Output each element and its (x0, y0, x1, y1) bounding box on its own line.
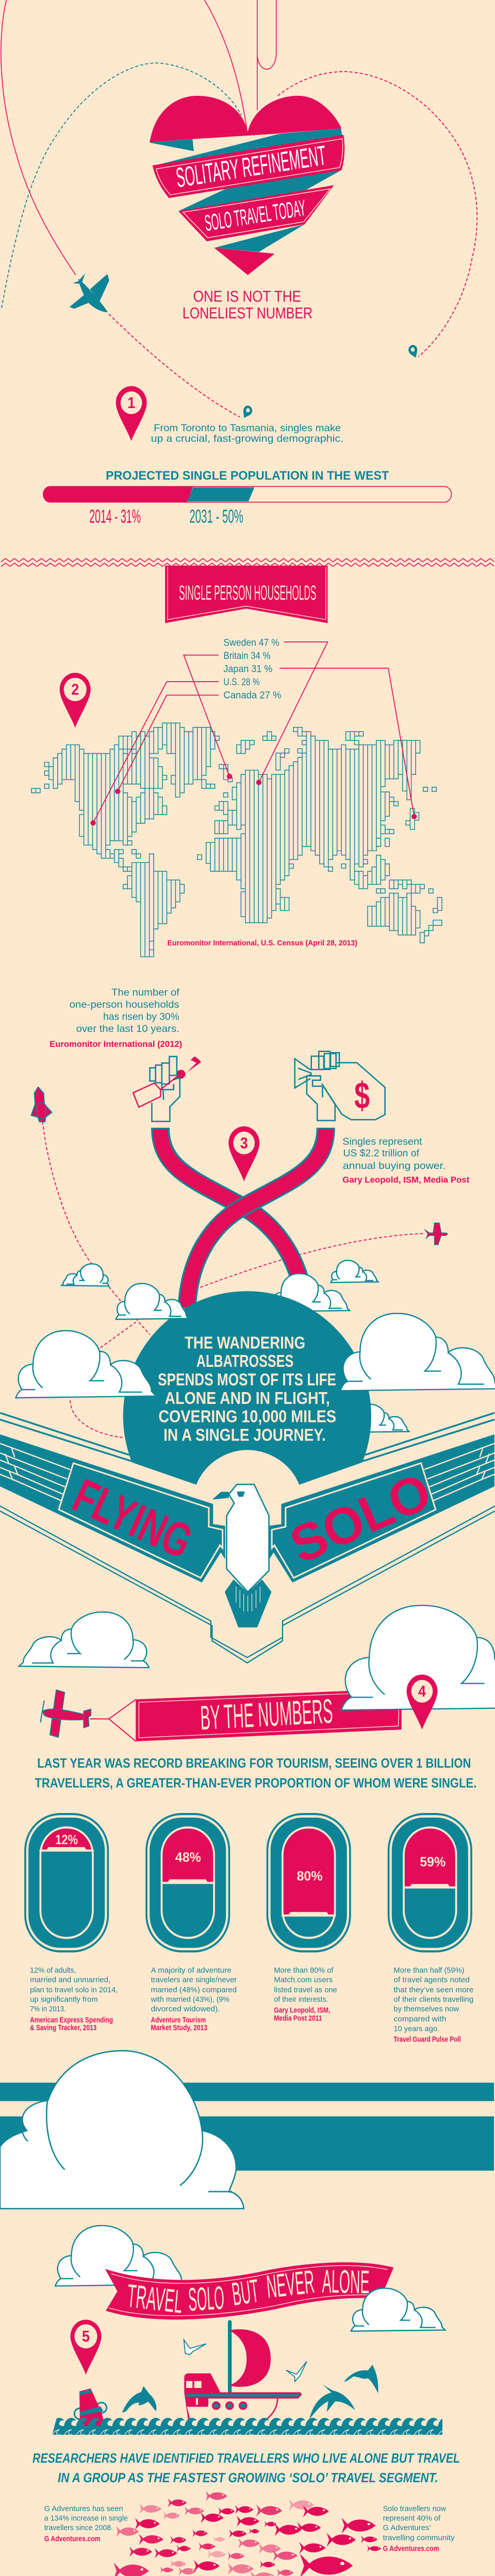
icon: biplane (40, 1690, 91, 1737)
stat: 40% of community: travelling community (383, 2534, 455, 2543)
wing left: FLYING (65, 1468, 200, 1569)
heart with ribbons (150, 96, 344, 275)
icon: rocket (31, 1087, 52, 1122)
callout text: ALONE AND IN FLIGHT, (165, 1388, 330, 1408)
icon: money bag (295, 1052, 385, 1121)
pin 1: 1 (127, 395, 135, 412)
pin 1 (116, 386, 147, 441)
icon: money bag: $ (354, 1075, 370, 1117)
caption 3: of their interests. (274, 1995, 328, 2004)
teal stripes (0, 2082, 494, 2171)
window 48% (145, 1813, 230, 1953)
country labels: Sweden 47 % (223, 637, 279, 648)
stat: buying power: Gary Leopold, ISM, Media Post (342, 1176, 470, 1185)
callout text: ALBATROSSES (196, 1351, 293, 1371)
ribbon banner (105, 2262, 393, 2319)
window 80%: 80% (296, 1869, 323, 1884)
tow lines (90, 1700, 136, 1741)
pin 3 (228, 1126, 259, 1181)
country labels: Britain 34 % (223, 650, 271, 661)
progress bar (43, 486, 451, 502)
stat: buying power: Singles represent (342, 1136, 422, 1147)
pin 5: 5 (82, 2328, 90, 2346)
map source: Euromonitor International, U.S. Census (April 28, 2013) (167, 939, 357, 947)
panel: header: SOLO TRAVEL TODAY (203, 195, 307, 236)
pin 2 (60, 673, 91, 728)
heading: RESEARCHERS HAVE IDENTIFIED TRAVELLERS WHO LIVE ALONE BUT TRAVEL (32, 2451, 460, 2466)
intro text (151, 422, 343, 444)
cloud (331, 1260, 378, 1282)
caption 3: Match.com users (274, 1976, 333, 1985)
icon: dolphin (344, 2365, 378, 2393)
panel: single person households: SINGLE PERSON HOUSEHOLDS (179, 582, 316, 605)
stat: buying power: US $2.2 trillion of (343, 1147, 420, 1159)
heading (32, 2451, 460, 2485)
caption 4: of travel agents noted (393, 1976, 470, 1985)
caption 3: Media Post 2011 (274, 2014, 322, 2022)
panel: albatross and ribbon (16, 1122, 495, 1485)
caption 3 (274, 1966, 337, 2022)
caption 2: Adventure Tourism (151, 2016, 206, 2024)
cloud (351, 2288, 445, 2331)
window 12% (24, 1813, 109, 1953)
tagline: ONE IS NOT THE (193, 288, 301, 306)
zigzag divider (1, 558, 494, 567)
heading: IN A GROUP AS THE FASTEST GROWING ‘SOLO’ TRAVEL SEGMENT. (58, 2471, 438, 2485)
stat: 40% of community (383, 2504, 455, 2553)
caption 2: travelers are single/never (151, 1976, 237, 1985)
stat: 40% of community: Solo travellers now (383, 2504, 447, 2513)
window 12%: 12% (55, 1833, 78, 1848)
country labels: Canada 27 % (223, 689, 281, 701)
cloud (19, 1612, 149, 1668)
caption 2: A majority of adventure (151, 1966, 232, 1975)
icon: dolphin (309, 2385, 355, 2419)
tagline (183, 288, 312, 322)
caption 2 (151, 1966, 237, 2032)
teal circle with callout (123, 1291, 371, 1485)
crossed ribbon (160, 1128, 326, 1308)
caption 4: 10 years ago. (393, 2025, 439, 2033)
icons: rocket, key hand, money bag hand (31, 1052, 385, 1122)
panel: by the numbers (0, 1605, 495, 2209)
caption 1: up significantly from (30, 1995, 98, 2004)
cloud (61, 1264, 109, 1286)
caption 1: American Express Spending (30, 2016, 113, 2024)
headline: LAST YEAR WAS RECORD BREAKING FOR TOURISM, SEEING OVER 1 BILLION (37, 1756, 471, 1771)
intro text: From Toronto to Tasmania, singles make (154, 422, 341, 433)
stat: one person households: one-person households (70, 998, 179, 1010)
panel: single person households (50, 566, 417, 1049)
stat: one person households (50, 987, 182, 1049)
school of fish (113, 2491, 382, 2576)
stat: one person households: over the last 10 years. (76, 1023, 179, 1034)
country labels: U.S. 28 % (223, 676, 260, 687)
icon: airplane (70, 273, 109, 312)
caption 3: Gary Leopold, ISM, (274, 2006, 330, 2014)
lower wing lines (0, 1506, 495, 1663)
banner title: NEVER (265, 2263, 316, 2305)
stat: buying power: annual buying power. (343, 1160, 446, 1171)
callout text: COVERING 10,000 MILES (158, 1406, 336, 1426)
icon: small plane (424, 1223, 448, 1245)
caption 4: by themselves now (393, 2005, 459, 2013)
bar label 2014: 2014 - 31% (89, 506, 141, 527)
big cloud (0, 2050, 244, 2209)
caption 1: married and unmarried, (30, 1976, 110, 1985)
pin 5 (71, 2320, 102, 2375)
banner title: SOLO (187, 2279, 225, 2318)
callout text: IN A SINGLE JOURNEY. (163, 1425, 326, 1445)
stat: 134% increase (44, 2504, 128, 2543)
icon: seagull (286, 2361, 307, 2382)
flight path lines (1, 0, 477, 417)
caption 2: Market Study, 2013 (151, 2024, 208, 2032)
icon: small map pin (240, 404, 254, 420)
albatross (212, 1484, 271, 1628)
stat: 40% of community: G Adventures.com (383, 2545, 439, 2553)
stat: buying power (342, 1136, 470, 1185)
banner (165, 566, 327, 623)
window 59% (388, 1813, 472, 1953)
caption 4 (393, 1966, 473, 2043)
world map (31, 723, 442, 957)
leader lines (90, 642, 417, 825)
banner (136, 1689, 402, 1741)
caption 1: 7% in 2013. (30, 2005, 66, 2013)
caption 4: Travel Guard Pulse Poll (393, 2036, 461, 2043)
stat: one person households: Euromonitor International (2012) (50, 1040, 182, 1049)
banner title (126, 2263, 370, 2320)
stat: 134% increase: G Adventures has seen (44, 2504, 123, 2513)
country labels: Japan 31 % (223, 663, 272, 674)
stat: 134% increase: travellers since 2008. (44, 2523, 113, 2532)
caption 4: of their clients travelling (393, 1995, 473, 2004)
caption 4: More than half (59%) (393, 1966, 465, 1975)
cloud (340, 1313, 495, 1391)
caption 3: More than 80% of (274, 1966, 333, 1975)
wing title: solo: SOLO (282, 1462, 439, 1574)
title: solitary refinement: SOLITARY REFINEMENT (174, 140, 327, 193)
banner title: BUT (230, 2272, 261, 2313)
stat: 134% increase: a 134% increase in single (44, 2514, 128, 2523)
caption 1: & Saving Tracker, 2013 (30, 2024, 97, 2032)
caption 3: listed travel as one (274, 1986, 337, 1994)
caption 1: plan to travel solo in 2014, (30, 1986, 118, 1994)
panel: travel solo but never alone: ALONE (322, 2263, 370, 2300)
window 59%: 59% (420, 1855, 446, 1870)
panel: travel solo but never alone (55, 2226, 445, 2375)
caption 4: that they’ve seen more (393, 1986, 473, 1994)
pin 4 (407, 1674, 438, 1730)
bar label 2031: 2031 - 50% (189, 506, 243, 527)
flight paths (43, 1122, 423, 1437)
caption 1 (30, 1966, 118, 2032)
cloud (116, 1283, 189, 1319)
pin 4: 4 (418, 1683, 426, 1700)
heading: projected single population: PROJECTED SINGLE POPULATION IN THE WEST (106, 468, 389, 483)
callout text: THE WANDERING (185, 1333, 305, 1352)
icon: dolphin (122, 2386, 156, 2413)
cloud (341, 1605, 495, 1710)
scene: boat, buoy, dolphin (74, 2320, 307, 2427)
intro text: up a crucial, fast-growing demographic. (151, 433, 343, 444)
stat: 40% of community: represent 40% of (383, 2514, 440, 2523)
tagline: LONELIEST NUMBER (183, 304, 312, 322)
icon: boat (184, 2320, 302, 2420)
panel: header (1, 0, 477, 527)
cloud (55, 2226, 186, 2286)
pin 2: 2 (71, 681, 79, 699)
cloud (16, 1331, 156, 1398)
callout text: SPENDS MOST OF ITS LIFE (158, 1369, 336, 1389)
stat: 134% increase: G Adventures.com (44, 2535, 101, 2543)
cloud (347, 1404, 409, 1432)
caption 2: married (48%) compared (151, 1986, 237, 1994)
caption 2: divorced widowed). (151, 2005, 220, 2013)
window 48%: 48% (175, 1850, 201, 1865)
waves (52, 2418, 442, 2435)
wing left (0, 1413, 225, 1583)
headline (35, 1756, 476, 1791)
country labels (223, 637, 281, 701)
headline: TRAVELLERS, A GREATER-THAN-EVER PROPORTION OF WHOM WERE SINGLE. (35, 1776, 476, 1791)
stat: one person households: has risen by 30% (103, 1011, 179, 1022)
panel: researchers (32, 2365, 460, 2576)
banner title: TRAVEL (126, 2277, 184, 2320)
panel: by the numbers: BY THE NUMBERS (200, 1692, 334, 1737)
pin 3: 3 (240, 1134, 248, 1152)
stat: 40% of community: G Adventures’ (383, 2523, 431, 2532)
caption 4: compared with (393, 2015, 447, 2024)
panel: bird and lower wings (0, 1484, 495, 1668)
cloud (271, 1274, 350, 1312)
callout text (158, 1333, 336, 1445)
icon: seagull (184, 2340, 206, 2354)
stat: one person households: The number of (111, 987, 180, 998)
icon: hand holding key (133, 1057, 201, 1122)
icon: buoy (74, 2388, 107, 2427)
caption 2: with married (43%), (9% (151, 1995, 229, 2004)
caption 1: 12% of adults, (30, 1966, 76, 1975)
icon: small map pin (407, 344, 420, 360)
window 80% (267, 1813, 351, 1953)
wing right (269, 1413, 494, 1583)
